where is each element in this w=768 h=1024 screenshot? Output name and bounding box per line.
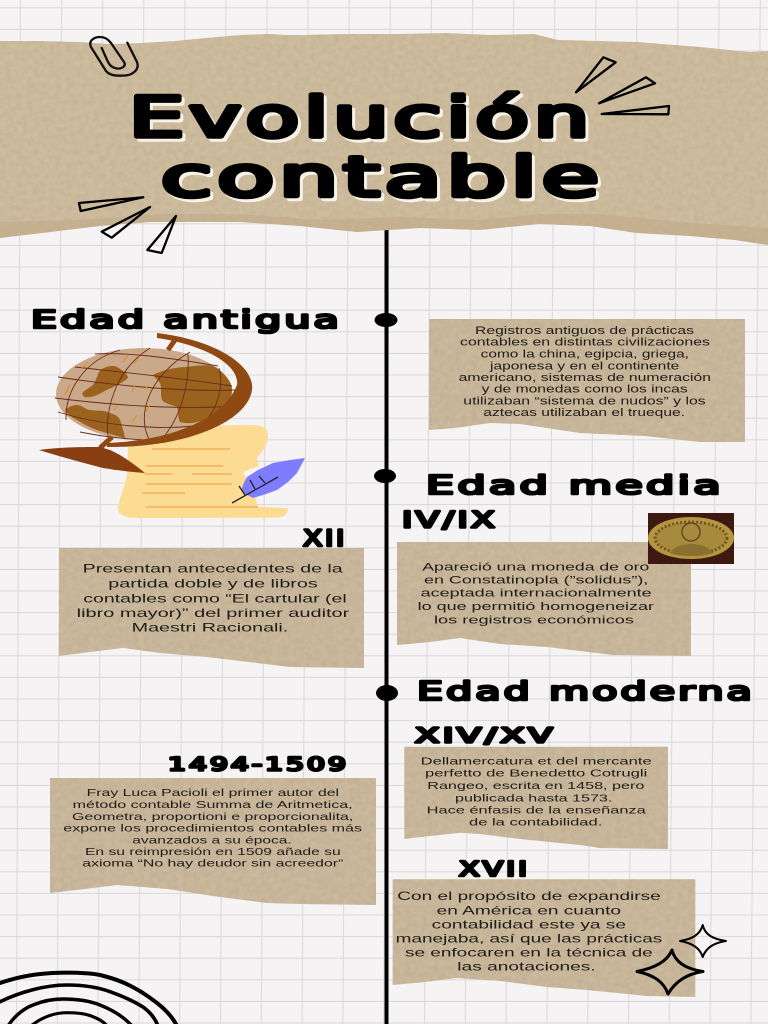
text panel: solidus: los registros económicos: [434, 614, 634, 626]
timeline marker: media: [374, 469, 396, 483]
text panel: Cotrugli: [404, 747, 668, 849]
heading: Edad moderna: Edad moderna: [417, 677, 755, 707]
orange flecks on globe: [65, 355, 150, 422]
text panel: registros antiguos: aztecas utilizaban el trueque.: [483, 407, 685, 419]
text panel: Cotrugli: publicada hasta 1573.: [455, 793, 612, 804]
icon: gold solidus coin: [648, 513, 734, 564]
text panel: Pacioli: expone los procedimientos contables más: [63, 824, 362, 835]
text panel: registros antiguos: Registros antiguos de prácticas: [475, 325, 694, 337]
illustration: globe and scroll: [39, 333, 305, 518]
text panel: Pacioli: Fray Luca Pacioli el primer autor del: [87, 788, 339, 799]
heading: Edad media: Edad media: [426, 471, 724, 501]
text panel: América: en América en cuanto: [437, 903, 622, 917]
text panel: Cotrugli: perfetto de Benedetto Cotrugli: [425, 769, 647, 780]
title: Evolución: [132, 88, 597, 152]
text panel: América: Con el propósito de expandirse: [397, 889, 661, 903]
icon: large sparkle: [637, 950, 703, 994]
globe sphere: [56, 348, 232, 440]
feather: [242, 458, 305, 498]
scroll: [118, 425, 288, 518]
timeline marker: antigua: [374, 313, 398, 327]
text panel: Cotrugli: Rangeo, escrita en 1458, pero: [427, 781, 645, 792]
text panel: solidus: Apareció una moneda de oro: [422, 562, 649, 574]
text panel: América: [393, 879, 695, 997]
text panel: Pacioli: Geometra, proportioni e proporcionalita,: [72, 812, 353, 823]
date: 1494-1509: 1494-1509: [168, 754, 349, 776]
text panel: solidus: [397, 542, 691, 656]
text panel: Pacioli: En su reimpresión en 1509 añade su: [85, 847, 341, 858]
text panel: solidus: aceptada internacionalmente: [421, 588, 652, 600]
icon: paperclip: [90, 37, 138, 76]
text panel: Pacioli: axioma “No hay deudor sin acreedor”: [82, 859, 344, 870]
text panel: partida doble: Maestri Racionali.: [132, 621, 288, 635]
text panel: registros antiguos: [429, 319, 745, 442]
text panel: partida doble: libro mayor)” del primer auditor: [77, 606, 349, 620]
text panel: registros antiguos: contables en distintas civilizaciones: [460, 337, 710, 349]
text panel: solidus: lo que permitió homogeneizar: [418, 601, 654, 613]
text panel: Cotrugli: de la contabilidad.: [469, 818, 602, 829]
text panel: Pacioli: avanzados a su época.: [132, 835, 292, 846]
date: XII: XII: [303, 527, 347, 552]
icon: upper right burst: [576, 57, 669, 114]
timeline marker: moderna: [376, 685, 398, 701]
date: XVII: XVII: [459, 857, 530, 881]
text panel: partida doble: [59, 548, 364, 668]
date: XIV/XV: XIV/XV: [415, 724, 556, 748]
globe base: [39, 447, 145, 473]
icon: small sparkle: [680, 925, 726, 957]
continents: [153, 365, 232, 423]
heading: Edad antigua: Edad antigua: [31, 305, 342, 334]
text panel: Cotrugli: Dellamercatura et del mercante: [421, 756, 652, 767]
text panel: Pacioli: método contable Summa de Aritmetica,: [73, 800, 353, 811]
text panel: América: las anotaciones.: [457, 960, 596, 974]
text panel: registros antiguos: americano, sistemas de numeración: [459, 372, 711, 384]
decoration: rainbow arcs: [0, 973, 177, 1024]
text panel: solidus: en Constatinopla (”solidus”),: [424, 574, 648, 586]
text panel: América: contabilidad este ya se: [432, 917, 627, 931]
torn paper title banner: [0, 33, 768, 245]
title: [129, 86, 607, 212]
title: contable: [164, 148, 607, 212]
title: Evolución: [129, 86, 594, 150]
date: IV/IX: IV/IX: [402, 508, 498, 534]
title: contable: [161, 145, 604, 209]
text panel: registros antiguos: japonesa y en el continente: [489, 360, 679, 372]
globe stand arc: [107, 333, 252, 447]
text panel: partida doble: Presentan antecedentes de la: [83, 562, 343, 576]
text panel: Cotrugli: Hace énfasis de la enseñanza: [427, 806, 646, 817]
icon: lower left burst: [79, 197, 176, 253]
text panel: Pacioli: [50, 778, 376, 905]
text panel: registros antiguos: y de monedas como los incas: [482, 384, 688, 396]
timeline axis: [384, 230, 388, 1024]
text panel: América: manejaba, así que las prácticas: [396, 932, 662, 946]
text panel: partida doble: contables como “El cartular (el: [83, 591, 347, 605]
globe meridians: [55, 348, 235, 441]
text panel: América: se enfocaren en la técnica de: [405, 946, 653, 960]
text panel: partida doble: partida doble y de libros: [108, 576, 318, 590]
text panel: registros antiguos: como la china, egipcia, griega,: [481, 349, 689, 361]
text panel: registros antiguos: utilizaban “sistema de nudos” y los: [463, 395, 706, 407]
